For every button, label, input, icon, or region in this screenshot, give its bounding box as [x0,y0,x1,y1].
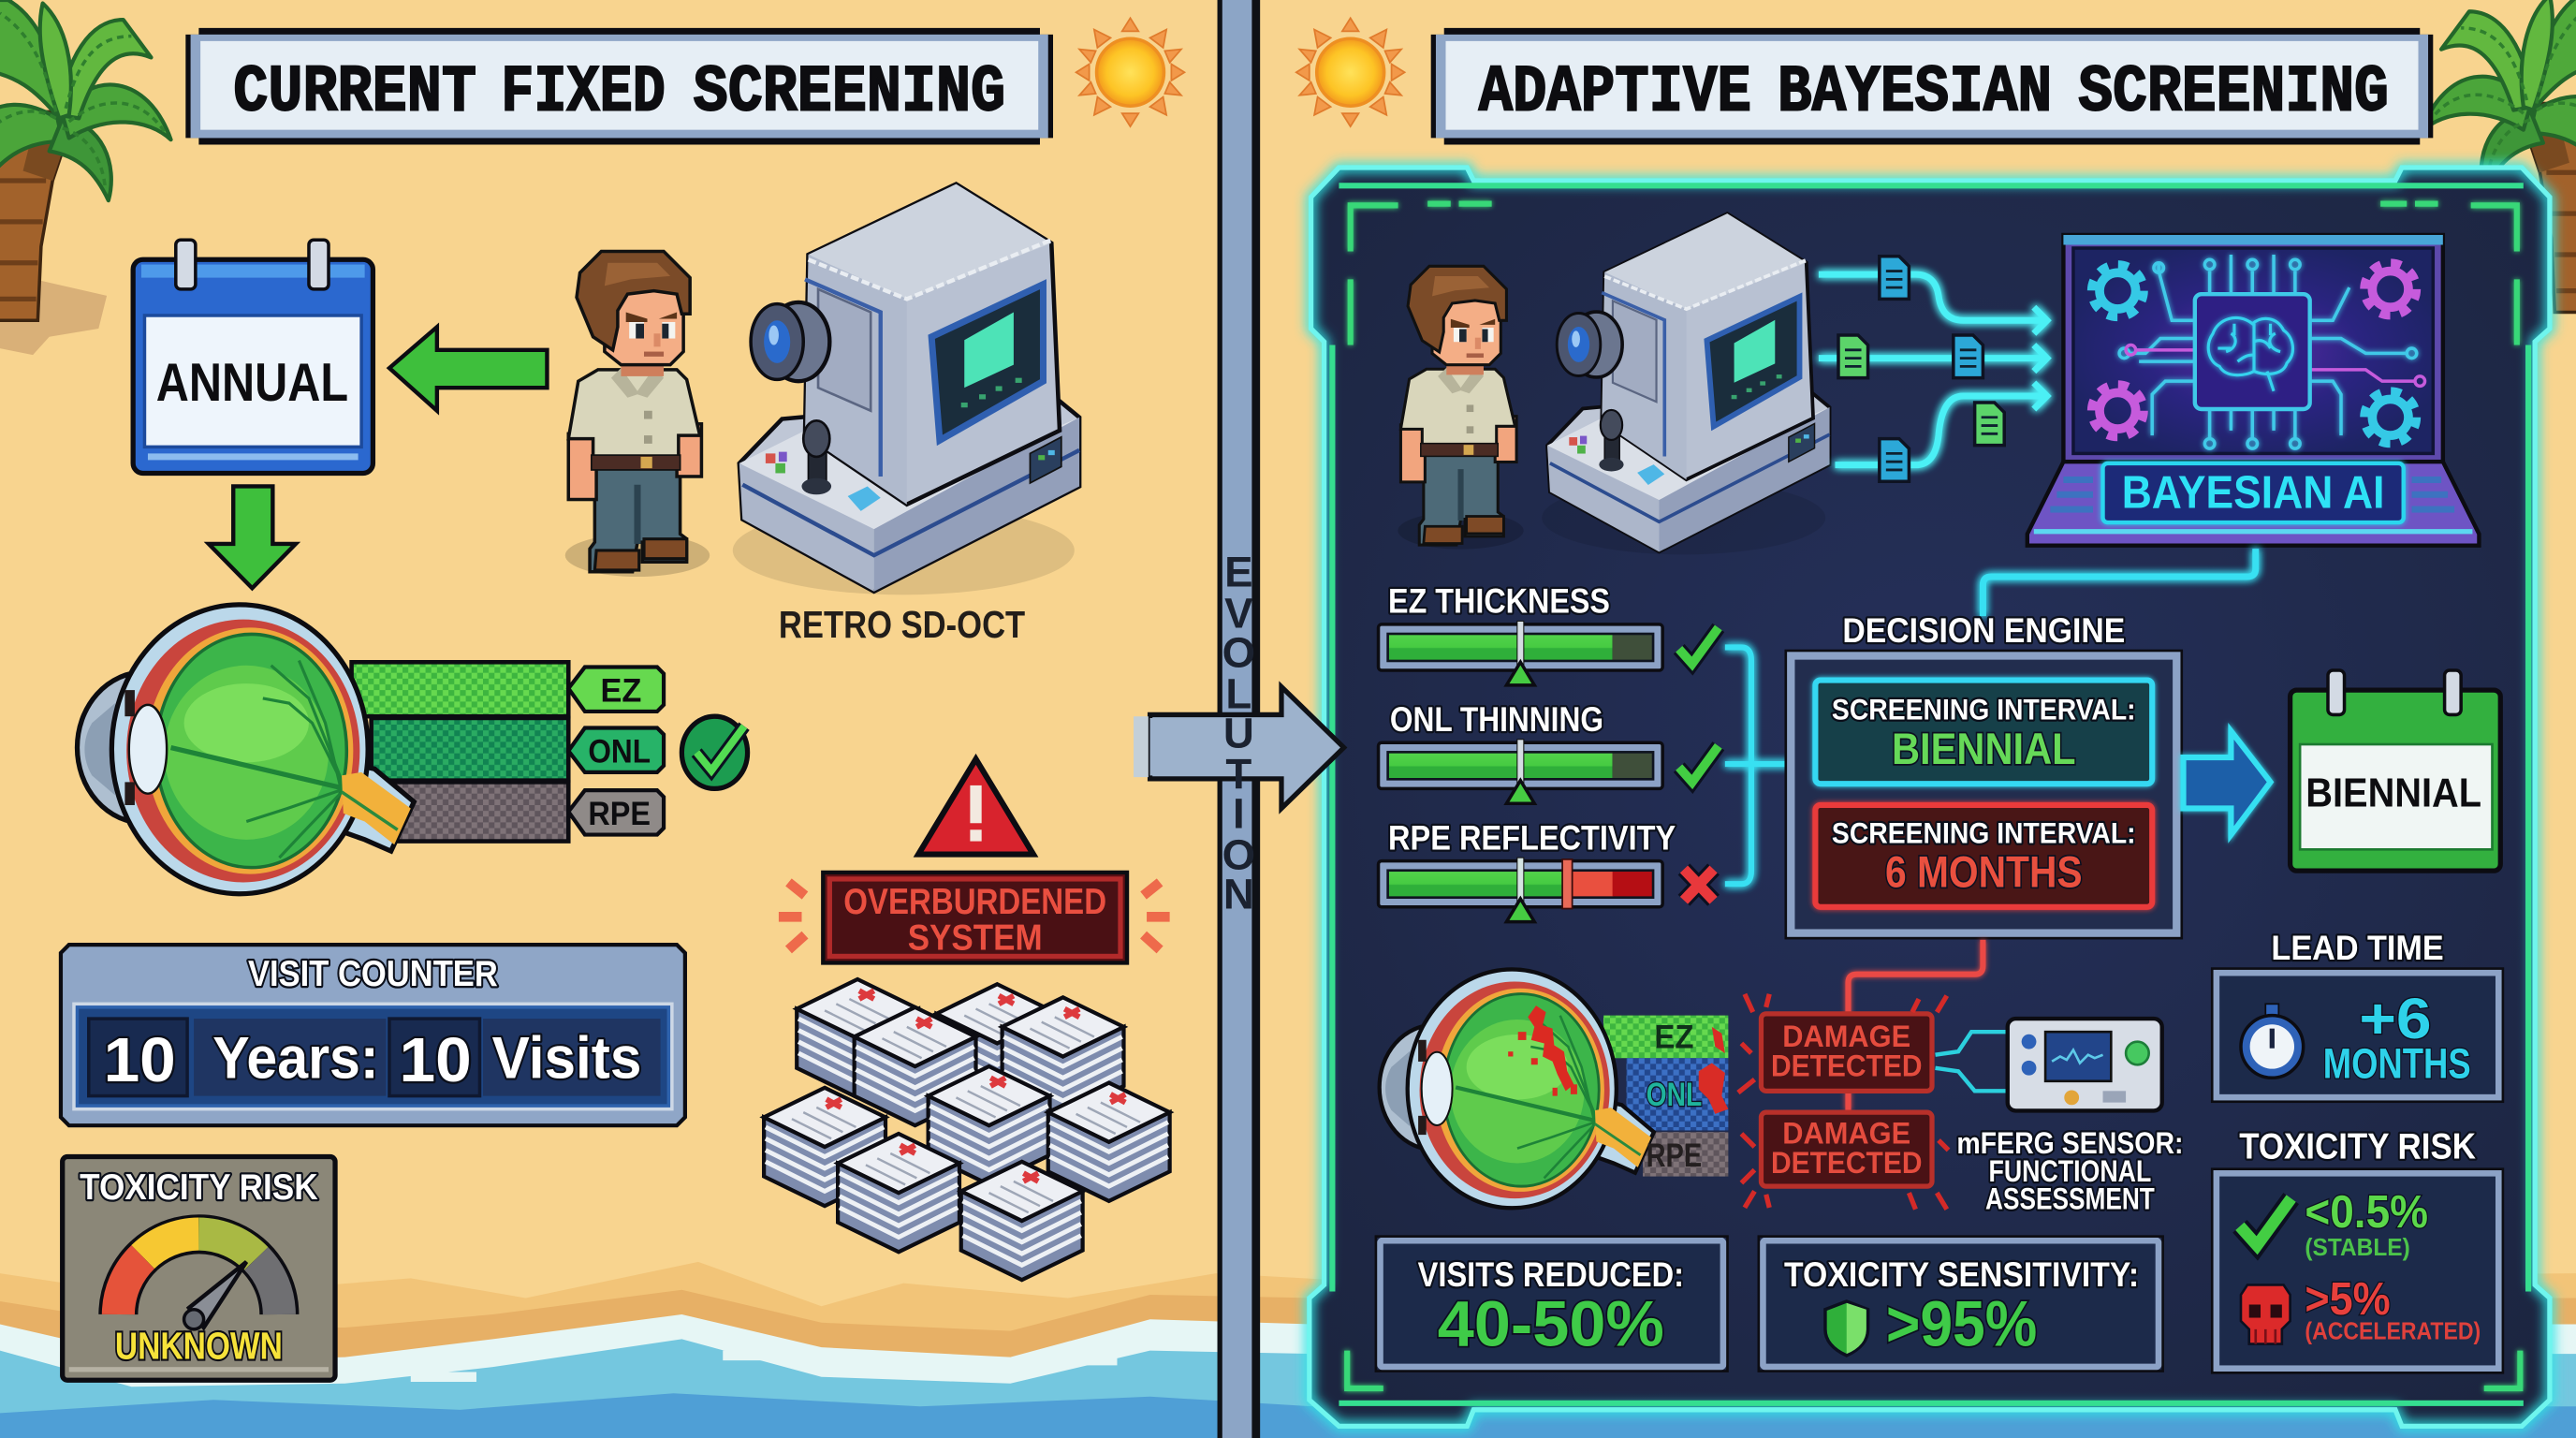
panel: toxicity sensitivity: >95% [1886,1287,2037,1359]
panel: visit counter [61,945,685,1125]
label: mferg sensor [1956,1126,2184,1216]
chart: risk gauge [118,1234,279,1314]
left palm tree [0,0,171,320]
panel: lead time [2212,969,2503,1102]
callout: damage detected: DETECTED [1771,1146,1922,1180]
slider: rpe reflectivity [1379,818,1676,922]
callout: damage detected [1761,1112,1932,1186]
panel: toxicity risk tiers: >5% [2305,1274,2391,1325]
calendar: biennial: BIENNIAL [2305,770,2481,816]
divider: evolution: U [1223,710,1254,757]
wires to sensor [1936,1032,2008,1091]
tag: onl [568,727,664,772]
panel: toxicity risk tiers: (STABLE) [2305,1233,2410,1261]
label: bayesian ai: BAYESIAN AI [2122,467,2385,518]
slider: ez thickness: EZ THICKNESS [1388,582,1610,621]
label: decision engine: DECISION ENGINE [1842,611,2125,650]
connector: ai to decision engine [1983,549,2256,616]
labels: retinal layers: ONL [1647,1077,1702,1113]
labels: retinal layers [1647,1020,1702,1174]
decision: biennial [1815,681,2152,784]
callout: overburdened system: OVERBURDENED [843,882,1106,922]
tag: rpe [568,790,664,835]
title: current fixed screening: SCREENING [694,57,1005,131]
label: retro sd-oct: RETRO SD-OCT [779,603,1025,646]
title: adaptive bayesian screening: BAYESIAN [1778,57,2052,131]
labels: retinal layers: RPE [1647,1137,1702,1174]
panel: current fixed screening [61,18,1184,1380]
label: lead time: LEAD TIME [2271,929,2444,967]
retinal layers chart [352,662,568,842]
panel: lead time: MONTHS [2323,1039,2471,1087]
title: current fixed screening: CURRENT [233,57,476,131]
panel: toxicity risk tiers: <0.5% [2305,1187,2428,1238]
icon: warning triangle [918,759,1033,855]
title: adaptive bayesian screening: ADAPTIVE [1479,57,1751,131]
callout: damage detected: DETECTED [1771,1049,1922,1083]
arrow: calendar to eye [209,486,296,588]
slider: onl thinning: ONL THINNING [1390,700,1603,739]
panel: toxicity risk unknown: TOXICITY RISK [80,1167,318,1208]
divider: evolution: N [1223,871,1254,918]
icon: check [1679,627,1719,664]
panel: visit counter: 10 [104,1026,176,1095]
icon: sun right [1296,18,1405,126]
title: adaptive bayesian screening: SCREENING [2078,57,2389,131]
tag: rpe: RPE [588,796,651,832]
decision: biennial: SCREENING INTERVAL: [1832,693,2136,726]
callout: damage detected: DAMAGE [1782,1116,1910,1150]
eye layers with damage [1603,1016,1728,1177]
panel: visit counter: VISIT COUNTER [248,954,498,994]
icon: check badge [681,716,748,788]
arrow: decision to biennial [2184,731,2271,835]
arrow: oct to calendar [389,327,547,411]
connector: sliders to decision engine [1725,647,1791,884]
icon: ai chip with brain [2195,294,2310,409]
icon: gears [2092,264,2416,443]
panel: toxicity sensitivity [1759,1237,2163,1372]
damage sparks [1738,994,1949,1210]
patient figure [1398,266,1524,550]
sand shadow under left palm [0,271,107,355]
circuit traces [2119,255,2417,448]
icon: stopwatch [2241,1004,2304,1078]
neon frame [1310,168,2550,1426]
divider: evolution: I [1233,790,1245,838]
divider: evolution: O [1222,830,1255,878]
tag: onl: ONL [588,733,651,770]
calendar: annual: ANNUAL [156,353,348,413]
calendar: biennial [2291,670,2500,871]
icon: shield [1825,1301,1868,1356]
decision: 6 months [1815,805,2152,907]
icon: x mark [1684,869,1714,901]
panel: visit counter: Visits [492,1025,641,1091]
calendar: annual [133,240,373,473]
callout: damage detected [1761,1014,1932,1091]
panel: visits reduced: VISITS REDUCED: [1418,1255,1684,1294]
divider: evolution: L [1225,669,1251,717]
laptop: bayesian ai [2027,235,2479,546]
decision: biennial: BIENNIAL [1892,725,2076,774]
panel: toxicity risk tiers: (ACCELERATED) [2305,1316,2481,1344]
panel: visit counter: Years: [212,1025,379,1091]
label: mferg sensor: FUNCTIONAL [1989,1154,2151,1188]
icon: data documents [1838,257,2004,481]
connector: decision to damage [1848,940,1983,1110]
divider: evolution [1134,0,1344,1438]
tag: ez: EZ [600,672,641,709]
icon: sun left [1076,18,1184,126]
title: current fixed screening [185,28,1053,144]
callout: overburdened system: SYSTEM [908,917,1043,958]
callout: overburdened system [779,873,1170,962]
divider: evolution: T [1225,750,1251,798]
label: toxicity risk: TOXICITY RISK [2239,1126,2476,1167]
patient figure [565,252,710,577]
tag: ez [568,668,664,712]
machine: retro sd-oct [733,184,1079,594]
divider: evolution: V [1224,589,1253,637]
machine: oct [1542,213,1830,554]
panel: visit counter: 10 [399,1026,472,1095]
title: adaptive bayesian screening [1431,28,2433,144]
divider: evolution: E [1224,549,1253,596]
divider: evolution: O [1222,629,1255,677]
panel: decision engine [1786,651,2182,938]
label: mferg sensor: mFERG SENSOR: [1956,1126,2184,1160]
panel: adaptive bayesian screening [1310,168,2550,1426]
icon: damaged eye [1380,969,1654,1208]
panel: lead time: +6 [2359,987,2432,1051]
panel: toxicity risk unknown: UNKNOWN [115,1324,283,1367]
icon: check [2240,1198,2291,1245]
panel: toxicity risk unknown [63,1157,335,1380]
panel: visits reduced [1376,1237,1727,1372]
icon: mferg sensor [2008,1019,2162,1110]
beach shoreline and waves [0,1262,2576,1438]
title: current fixed screening: FIXED [501,57,666,131]
label: mferg sensor: ASSESSMENT [1985,1182,2155,1216]
slider: onl thinning [1379,700,1662,803]
data flow lines [1819,274,2047,465]
icon: check [1679,746,1719,782]
panel: toxicity sensitivity: TOXICITY SENSITIVITY: [1784,1255,2139,1294]
labels: retinal layers: EZ [1654,1020,1694,1056]
panel: visits reduced: 40-50% [1438,1287,1664,1359]
slider: ez thickness [1379,582,1662,685]
paper stacks [764,979,1170,1280]
icon: healthy eye [77,605,414,894]
slider: rpe reflectivity: RPE REFLECTIVITY [1388,818,1676,857]
right palm tree [2422,0,2576,312]
callout: damage detected: DAMAGE [1782,1020,1910,1053]
decision: 6 months: SCREENING INTERVAL: [1832,815,2136,849]
panel: toxicity risk tiers [2212,1169,2503,1372]
decision: 6 months: 6 MONTHS [1885,848,2083,898]
icon: skull [2241,1284,2291,1344]
